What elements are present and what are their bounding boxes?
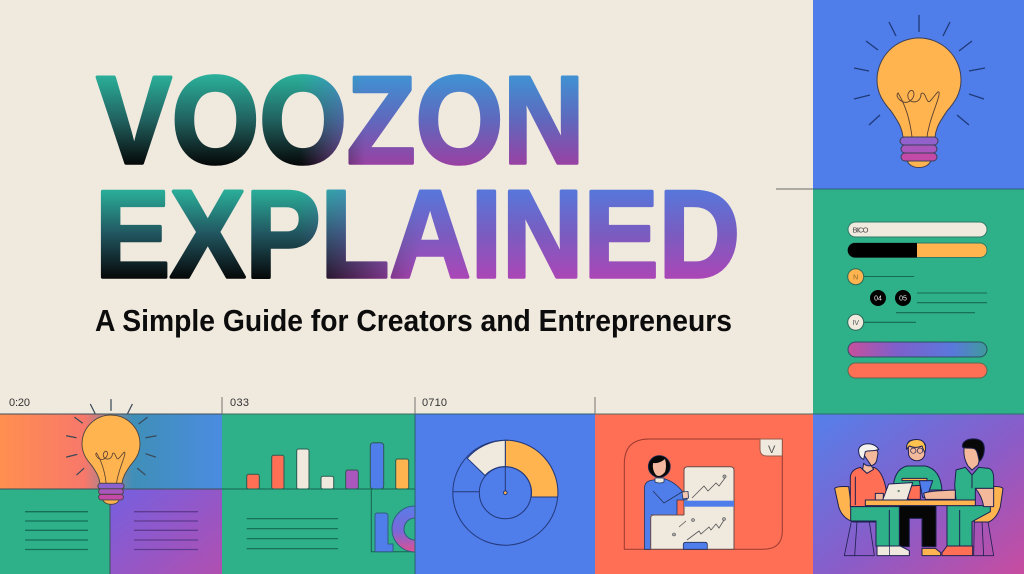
bar chart bars	[247, 443, 409, 489]
left chair	[835, 487, 875, 556]
step list	[848, 269, 987, 330]
panel: donut chart	[415, 414, 595, 574]
icon: small lightbulb	[66, 399, 157, 504]
donut chart	[453, 440, 558, 545]
panel: team at table	[813, 414, 1024, 574]
person: centre with glasses	[893, 439, 942, 556]
gradient bar	[848, 342, 987, 357]
time label 3: 0710	[422, 397, 447, 409]
time label 1: 0:20	[9, 397, 30, 409]
title: EXPLAINED	[95, 166, 740, 304]
right text lines	[134, 512, 198, 550]
icon: large lightbulb	[854, 15, 985, 168]
right chair	[974, 487, 1003, 556]
person: left with white hair	[850, 444, 909, 556]
step list: N	[853, 274, 858, 282]
back chart card	[684, 467, 734, 549]
team illustration	[835, 439, 1003, 556]
timeline ticks	[222, 397, 595, 414]
panel: green progress widgets	[813, 189, 1024, 414]
text lines	[247, 519, 338, 549]
label bar: BICO	[852, 226, 869, 234]
title	[95, 52, 740, 304]
step list: IV	[852, 320, 859, 327]
panel: bar chart	[222, 414, 414, 574]
person	[644, 456, 688, 549]
tag: V	[768, 444, 776, 456]
panel: top right lightbulb	[813, 0, 1024, 189]
time label 2: 033	[230, 397, 249, 409]
step list: 04	[874, 296, 882, 302]
panel: person with charts	[595, 414, 813, 574]
person: right with black hair	[924, 439, 994, 556]
table	[865, 500, 975, 506]
subtitle: A Simple Guide for Creators and Entrepreneurs	[95, 303, 732, 338]
step list: 05	[899, 296, 907, 302]
panel: lightbulb quadrant	[0, 399, 222, 574]
progress bar	[848, 243, 987, 258]
front chart card	[651, 515, 734, 549]
connector line	[776, 188, 813, 190]
label bar	[848, 222, 987, 237]
logo shapes	[374, 506, 414, 552]
coral bar	[848, 363, 987, 378]
laptop and papers	[883, 478, 933, 500]
tag	[760, 439, 782, 456]
title: VOOZON	[96, 52, 584, 190]
frame	[624, 439, 782, 549]
left text lines	[25, 512, 88, 550]
